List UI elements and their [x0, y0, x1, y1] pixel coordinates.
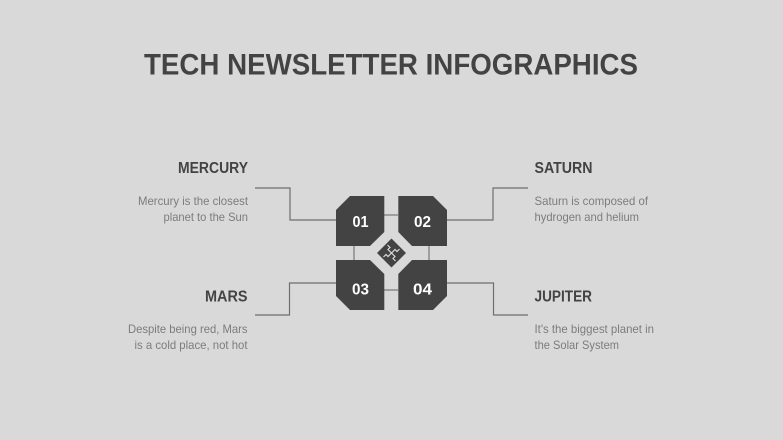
title: TECH NEWSLETTER INFOGRAPHICS — [144, 48, 638, 82]
text block: saturn description — [534, 194, 649, 224]
heading: mercury: MERCURY — [178, 160, 248, 177]
tile 04: 04 — [413, 282, 432, 298]
text block: mercury description — [138, 194, 249, 224]
icon: puzzle diamond — [377, 238, 406, 268]
panel: saturn — [447, 160, 649, 224]
text block: saturn description: hydrogen and helium — [534, 210, 639, 224]
text block: jupiter description — [534, 322, 654, 352]
connector: jupiter to 04 — [447, 283, 528, 315]
connector: mars to 03 — [255, 283, 336, 315]
heading: mars: MARS — [205, 288, 248, 306]
tile 01: 01 — [352, 214, 369, 231]
connector: saturn to 02 — [447, 188, 528, 220]
text block: jupiter description: It's the biggest planet in — [534, 322, 654, 336]
text block: mars description: is a cold place, not hot — [134, 338, 248, 352]
text block: mercury description: Mercury is the closest — [138, 194, 249, 208]
connector: mercury to 01 — [255, 188, 336, 220]
panel: mercury — [138, 160, 336, 224]
text block: saturn description: Saturn is composed of — [534, 194, 649, 208]
text block: mercury description: planet to the Sun — [164, 210, 248, 224]
central diagram — [336, 196, 447, 310]
text block: mars description — [128, 322, 248, 352]
panel: jupiter — [447, 283, 654, 352]
tile 02: 02 — [414, 214, 431, 231]
heading: jupiter: JUPITER — [534, 288, 592, 306]
connectors between tiles — [354, 215, 429, 290]
text block: mars description: Despite being red, Mars — [128, 322, 248, 336]
text block: jupiter description: the Solar System — [534, 338, 619, 352]
heading: saturn: SATURN — [534, 160, 592, 177]
panel: mars — [128, 283, 336, 352]
tile 03: 03 — [352, 282, 369, 298]
